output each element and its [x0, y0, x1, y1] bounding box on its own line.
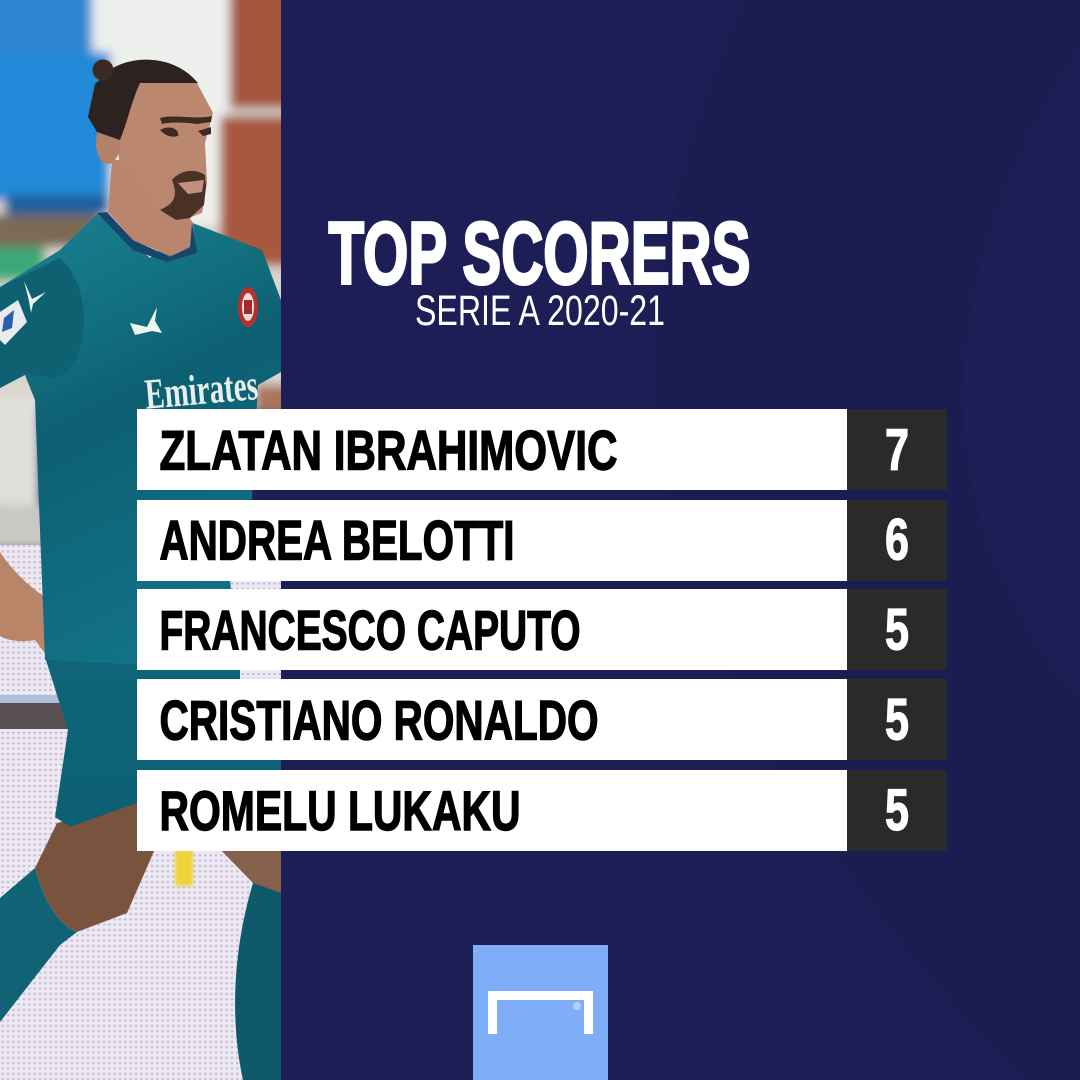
- hair and bun: [88, 60, 198, 140]
- legs: [35, 803, 158, 932]
- beard and moustache: [160, 171, 206, 220]
- mouth: [178, 180, 204, 194]
- row: Francesco Caputo: 5: [885, 598, 909, 662]
- photo: player in AC Milan kit: [0, 0, 290, 1080]
- jersey: [0, 214, 281, 670]
- kit details: Emirates: [143, 362, 260, 419]
- collar: [97, 212, 197, 262]
- row: Cristiano Ronaldo: CRISTIANO RONALDO: [160, 688, 598, 752]
- row: Francesco Caputo: [137, 589, 947, 670]
- neck: [108, 160, 195, 256]
- row: Cristiano Ronaldo: 5: [885, 688, 909, 752]
- heading: top scorers: TOP SCORERS: [328, 204, 750, 302]
- row: Cristiano Ronaldo: [137, 679, 947, 760]
- row: Romelu Lukaku: ROMELU LUKAKU: [160, 779, 520, 842]
- ear: [96, 132, 118, 164]
- row: Zlatan Ibrahimovic: [137, 409, 947, 490]
- row: Andrea Belotti: [137, 500, 947, 581]
- subheading: Serie A 2020-21: SERIE A 2020-21: [415, 287, 665, 335]
- sleeve: [0, 258, 84, 388]
- eyebrows and eyes: [160, 116, 212, 137]
- row: Andrea Belotti: ANDREA BELOTTI: [160, 508, 514, 572]
- row: Zlatan Ibrahimovic: ZLATAN IBRAHIMOVIC: [160, 418, 618, 482]
- row: Francesco Caputo: FRANCESCO CAPUTO: [160, 598, 580, 662]
- arm and hand: [0, 552, 45, 653]
- head: [118, 83, 213, 222]
- kit details: [0, 281, 260, 419]
- row: Zlatan Ibrahimovic: 7: [885, 418, 909, 482]
- row: Romelu Lukaku: [137, 770, 947, 851]
- row: Romelu Lukaku: 5: [885, 778, 909, 843]
- shorts: [45, 657, 281, 835]
- stadium background: [0, 0, 290, 1080]
- socks: [0, 868, 77, 1022]
- logo: goal icon: [473, 945, 608, 1080]
- row: Andrea Belotti: 6: [885, 508, 909, 572]
